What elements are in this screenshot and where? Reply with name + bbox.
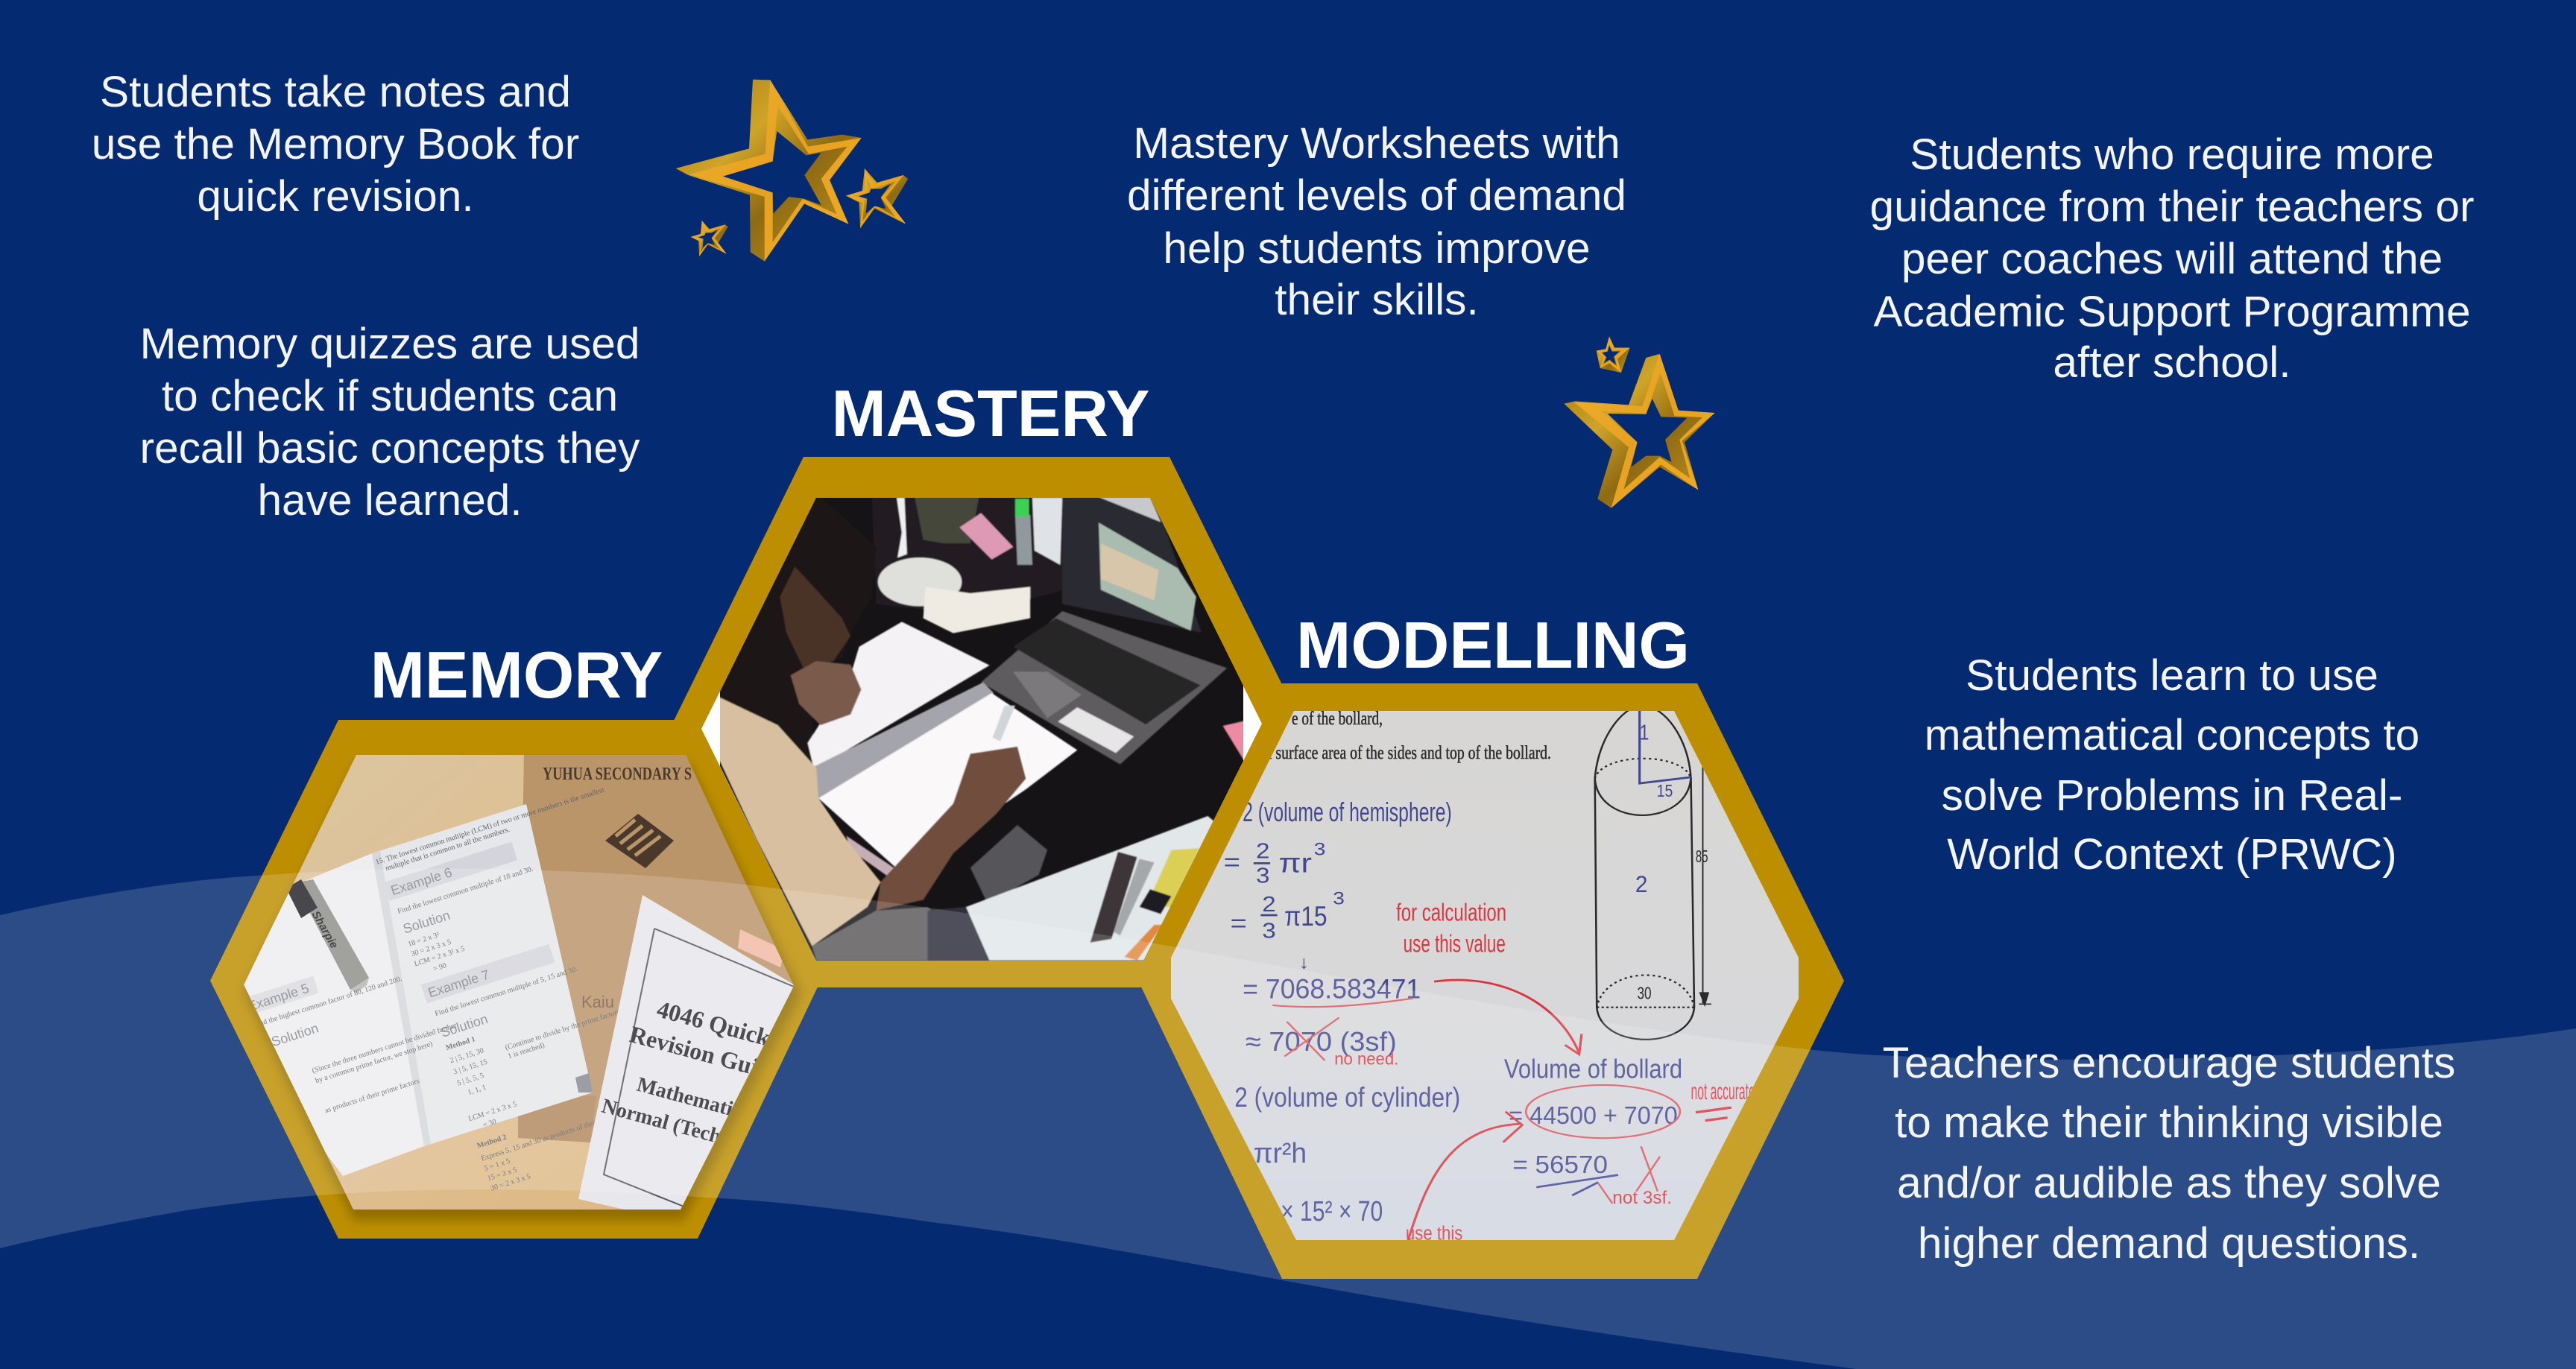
marker pen: Sharpie [309,909,341,951]
photo: student working at a desk with laptop [716,492,1252,969]
book page text: Solution [439,1011,490,1040]
text block: real-world context: mathematical concepts to [1925,711,2419,759]
revision guide booklet: Revision Guide [627,1020,784,1087]
book page text: Solution [401,908,452,937]
text block: real-world context: Students learn to use [1966,651,2378,700]
book page text: (Continue to divide by the prime factors until [504,1003,636,1052]
hexagon frame: modelling [1138,683,1844,1279]
book page text: Method 1 [445,1035,476,1052]
blue handwriting: working [1224,797,1682,1227]
cylinder and hemisphere diagram: 2 [1635,871,1648,897]
school logo [605,814,674,868]
book page text: Find the lowest common multiple of 5, 15 and 30. [434,965,578,1018]
blue handwriting: working: πr [1279,847,1312,879]
panel: mastery hexagon [673,457,1301,987]
book page text: = 90 [432,961,447,973]
printed question text: l surface area of the sides and top of the bollard. [1268,743,1551,763]
photo: memory book and revision guide: as products of their prime factors [323,1077,420,1115]
handwriting on folder: Kaiu [581,993,614,1011]
text block: memory book: use the Memory Book for [92,120,579,168]
large star [676,80,862,262]
book page text: LCM = 2 x 3 x 5 [467,1100,518,1123]
red teacher annotations: use this value [1404,930,1506,958]
panel: modelling hexagon [1138,683,1844,1279]
photo: worked solution on bollard volume [1163,704,1804,1248]
book page text: 30 = 2 x 3 x 5 [490,1172,531,1193]
text block: mastery worksheets: Mastery Worksheets with [1133,119,1620,168]
book page text [376,788,619,1191]
book page text: Find the lowest common multiple of 18 and 30. [397,865,534,916]
blue handwriting: working: = 56570 [1512,1151,1608,1178]
blue handwriting: working: ↓ [1298,952,1309,973]
small star right [846,168,908,229]
blue handwriting: working: 3 [1314,839,1325,859]
text block: memory quizzes: Memory quizzes are used [140,320,640,368]
red teacher annotations [1272,899,1755,1245]
large star [1564,354,1715,508]
book page text: 3 | 5, 15, 15 [452,1058,488,1076]
text block: academic support programme: Academic Support Programme [1873,288,2471,336]
book page text: Example 6 [389,864,454,898]
blue handwriting: working: ≈ 7070 (3sf) [1246,1027,1397,1057]
blue handwriting: working: = [1231,910,1247,938]
text block: visible thinking: Teachers encourage students [1883,1039,2455,1087]
blue handwriting: working: 2 (volume of hemisphere) [1243,797,1452,827]
blue handwriting: working: 2 [1256,839,1269,863]
book page text: LCM = 2 x 3² x 5 [414,945,466,969]
school name on folder: YUHUA SECONDARY S [543,765,692,784]
blue handwriting: working: 2 [1262,892,1276,916]
blue handwriting: working: = [1224,848,1240,876]
text block: memory quizzes: recall basic concepts they [140,424,640,472]
text block: real-world context: World Context (PRWC) [1947,830,2397,879]
book page text: Example 7 [426,967,491,1000]
text block: memory book: quick revision. [197,172,474,221]
text block: mastery worksheets: their skills. [1275,276,1479,324]
text block: memory quizzes: have learned. [257,476,523,525]
book page text: 18 = 2 x 3² [407,931,441,949]
book page text: 5 = 1 x 5 [483,1157,511,1173]
book page text: 2 | 5, 15, 30 [449,1046,484,1065]
book page text: Method 2 [476,1134,508,1150]
red teacher annotations: no need. [1334,1049,1398,1069]
heading: mastery: MASTERY [832,376,1149,450]
text block: memory quizzes: to check if students can [162,372,618,420]
revision guide booklet: Mathematics [634,1073,752,1125]
blue handwriting: working: 2 (volume of cylinder) [1234,1081,1460,1113]
revision guide booklet [578,895,805,1222]
blue handwriting: working: = 7068.583471 [1243,973,1421,1005]
wave overlay [0,868,2576,1369]
cylinder and hemisphere diagram: 30 [1637,984,1652,1003]
small star [1597,337,1630,373]
text block: mastery worksheets: help students improve [1163,224,1591,273]
book page text: 30 = 2 x 3 x 5 [410,938,452,958]
hexagon frame: mastery [673,457,1301,987]
blue handwriting: working: 3 [1256,864,1269,888]
text block: visible thinking: to make their thinking visible [1895,1098,2443,1147]
text block: academic support programme: guidance from their teachers or [1870,183,2474,231]
photo: memory book and revision guide: Example 5 [246,981,311,1014]
blue handwriting: working: 3 [1262,919,1276,943]
panel: memory hexagon [210,720,821,1239]
photo: memory book and revision guide [239,749,805,1222]
book page text: 1 is reached) [507,1041,546,1060]
book page text: 5 | 5, 5, 5 [456,1072,485,1088]
revision guide booklet: 4046 Quick [654,996,773,1052]
small star left [691,221,728,256]
heading: memory: MEMORY [370,638,663,712]
book page text: multiple that is common to all the numbers. [385,826,511,873]
photo: memory book and revision guide: Find the highest common factor of 80, 120 and 200. [253,975,403,1030]
text block: academic support programme: after school. [2053,338,2291,387]
book page text: 1, 1, 1 [467,1084,487,1097]
red teacher annotations: for calculation [1396,899,1506,926]
red teacher annotations: not 3sf. [1612,1187,1672,1208]
text block: mastery worksheets: different levels of demand [1127,171,1626,220]
blue handwriting: working: = 44500 + 7070 [1509,1102,1678,1129]
book page text: 15. The lowest common multiple (LCM) of two or more numbers is the smallest [375,786,605,867]
red teacher annotations: use this [1406,1222,1462,1245]
text block: academic support programme: Students who require more [1910,130,2434,179]
white hexagon backing: mastery [701,498,1262,961]
book page text: Express 5, 15 and 30 as products of their prime factors. [480,1105,640,1163]
blue handwriting: working: × 15² × 70 [1281,1195,1383,1227]
blue handwriting: working: π15 [1284,900,1328,932]
heading: modelling: MODELLING [1296,608,1690,682]
printed question text [1268,709,1551,763]
text block: memory book: Students take notes and [100,68,571,116]
text block: visible thinking: and/or audible as they solve [1897,1159,2441,1207]
soft shadow under memory hexagon photo [244,762,801,1221]
text block: real-world context: solve Problems in Real- [1942,771,2402,820]
text block: academic support programme: peer coaches will attend the [1901,235,2443,283]
icon: gold stars top left [676,80,908,262]
cylinder and hemisphere diagram: 15 [1657,782,1673,801]
text block: visible thinking: higher demand questions. [1918,1219,2420,1268]
icon: gold stars centre right [1564,337,1715,508]
blue handwriting: working: 3 [1333,888,1345,908]
cylinder and hemisphere diagram: 1 [1640,721,1649,744]
cylinder and hemisphere diagram [1595,705,1711,1040]
printed question text: e of the bollard, [1292,709,1383,729]
revision guide booklet: Normal (Technical) [599,1095,772,1162]
photo: memory book and revision guide: by a common prime factor, we stop here) [315,1040,434,1085]
blue handwriting: working: Volume of bollard [1504,1054,1682,1084]
marker pen [286,879,369,993]
book page text: = 30 [482,1118,497,1130]
hexagon frame: memory [210,720,821,1239]
cylinder and hemisphere diagram: 85 [1696,847,1708,867]
photo: worked solution on bollard volume: not accurate [1691,1078,1755,1104]
photo: memory book and revision guide: Solution [270,1020,321,1049]
book page text: 15 = 3 x 5 [487,1166,518,1183]
blue handwriting: working: πr²h [1254,1136,1307,1169]
photo: memory book and revision guide: (Since the three numbers cannot be divided further [311,1021,458,1075]
